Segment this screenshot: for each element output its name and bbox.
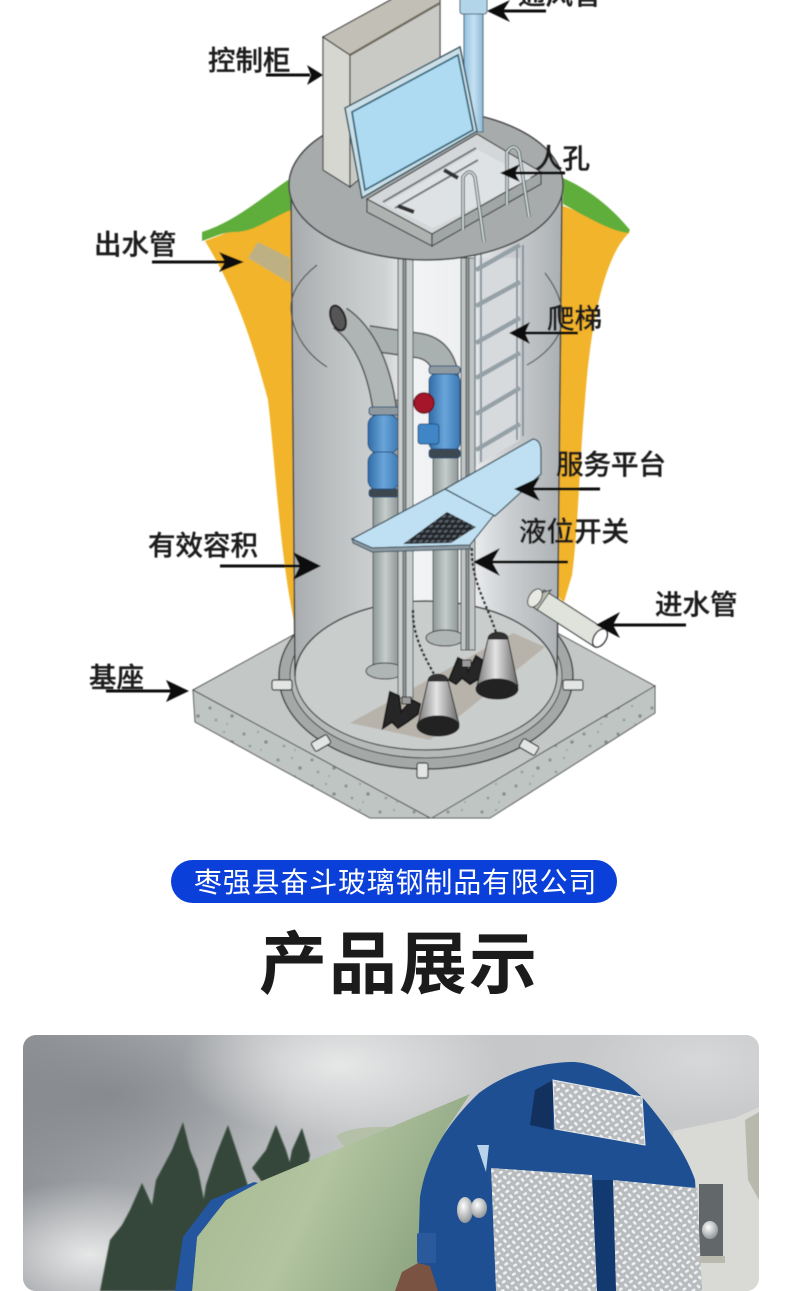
pump couplings — [383, 656, 482, 728]
product photo — [23, 1035, 759, 1291]
submersible pumps — [383, 632, 518, 736]
floor grating — [403, 512, 476, 544]
label: effective volume — [148, 530, 321, 580]
gate valve — [414, 393, 434, 413]
label: service platform: 服务平台 — [556, 449, 666, 480]
label: ladder: 爬梯 — [547, 303, 602, 334]
label: inlet pipe: 进水管 — [655, 589, 738, 620]
label: level switch: 液位开关 — [519, 516, 629, 547]
label: vent pipe — [487, 0, 600, 22]
right door plate — [613, 1180, 702, 1291]
left blue band — [175, 1182, 258, 1291]
ladder — [475, 245, 523, 467]
top checker plate — [530, 1080, 645, 1145]
label: level switch — [473, 516, 629, 576]
pump left — [417, 674, 459, 736]
knobs — [457, 1197, 718, 1239]
control cabinet — [323, 0, 440, 187]
trees — [100, 1122, 310, 1291]
left door plate — [491, 1168, 597, 1291]
label: effective volume: 有效容积 — [148, 530, 258, 561]
wall curve lines — [291, 265, 563, 367]
sky — [23, 1035, 759, 1291]
label: base: 基座 — [89, 662, 144, 693]
green tank body — [192, 1094, 470, 1291]
base flange ring and floor — [279, 583, 573, 769]
company name pill — [171, 860, 617, 903]
discharge pipe elbows — [327, 303, 447, 412]
soil: right side — [556, 178, 630, 602]
side bracket — [417, 1233, 436, 1263]
guide rails — [398, 258, 475, 698]
tank cap — [336, 1127, 391, 1148]
blue pipe couplings — [368, 366, 460, 497]
label: ladder — [509, 303, 602, 344]
vent pipe — [460, 0, 487, 132]
small flag — [477, 1145, 489, 1172]
worker — [395, 1263, 438, 1291]
right riser pipe — [426, 370, 464, 646]
blue tank end — [417, 1062, 702, 1291]
label: inlet pipe — [596, 589, 738, 638]
label: control cabinet — [208, 45, 323, 85]
clamps — [272, 680, 583, 778]
label: outlet pipe: 出水管 — [94, 229, 176, 260]
soil: left side — [202, 178, 300, 630]
open manhole lid — [345, 47, 477, 198]
label: base — [89, 662, 189, 702]
tank cover disc — [289, 110, 563, 260]
left riser pipe — [366, 400, 404, 679]
heading: 产品展示 — [259, 927, 539, 1003]
door gap — [592, 1180, 616, 1291]
service platform — [352, 439, 541, 552]
label: outlet pipe — [94, 229, 244, 272]
label: service platform — [514, 449, 666, 501]
label: manhole — [500, 143, 590, 182]
manhole frame — [367, 134, 541, 246]
chains — [413, 548, 497, 680]
label: manhole: 人孔 — [535, 143, 590, 174]
tank wall — [291, 190, 562, 676]
company name pill: 枣强县奋斗玻璃钢制品有限公司 — [194, 867, 597, 898]
inlet pipe — [525, 586, 610, 650]
label: control cabinet: 控制柜 — [208, 45, 290, 76]
handrails — [463, 147, 529, 242]
building — [673, 1107, 759, 1291]
diagram: integrated pump station cutaway — [89, 0, 738, 818]
pump right — [476, 632, 518, 699]
concrete base slab — [193, 628, 655, 818]
